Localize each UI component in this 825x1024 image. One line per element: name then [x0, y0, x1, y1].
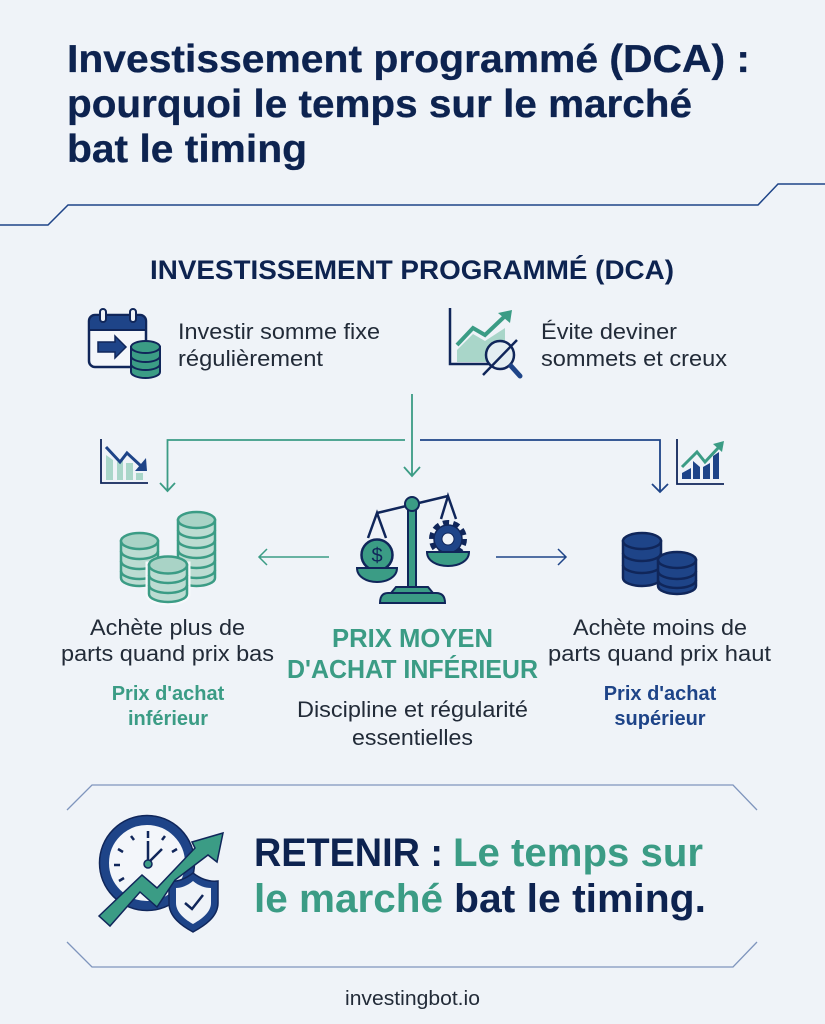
icon: rising chart [677, 439, 724, 484]
callout text: bat le timing. [454, 877, 706, 921]
text: higher purchase price [604, 683, 717, 730]
text: avoid guessing tops and bottoms [541, 319, 727, 371]
text: lower purchase price [112, 683, 225, 730]
arrow: to right coins [496, 549, 566, 565]
text: buy fewer shares: Achète moins de [573, 615, 747, 640]
arrow: branch to left [160, 440, 405, 491]
icon: calendar with coins [89, 309, 160, 378]
title: pourquoi le temps sur le marché [67, 83, 692, 126]
callout frame [67, 785, 757, 967]
callout text: le marché [254, 877, 443, 921]
text: buy more shares: Achète plus de [90, 615, 245, 640]
text: avoid guessing tops and bottoms: sommets et creux [541, 346, 727, 371]
text: buy fewer shares: parts quand prix haut [548, 641, 771, 666]
text: higher purchase price: supérieur [614, 708, 706, 730]
text: invest fixed amount: régulièrement [178, 346, 323, 371]
title: Investissement programmé (DCA) : [67, 38, 750, 81]
text: avoid guessing tops and bottoms: Évite deviner [541, 319, 677, 344]
text: lower average price [287, 623, 538, 684]
arrow: branch to right [420, 440, 668, 492]
icon: balance scale [357, 496, 469, 603]
title [67, 38, 750, 171]
icon: chart with magnifier [450, 308, 520, 376]
text: invest fixed amount: Investir somme fixe [178, 319, 380, 344]
text: lower average price: PRIX MOYEN [332, 623, 493, 653]
text: discipline: essentielles [352, 725, 473, 750]
text: discipline [297, 697, 528, 750]
text: buy more shares: parts quand prix bas [61, 641, 274, 666]
text: buy more shares [61, 615, 274, 666]
text: lower purchase price: Prix d'achat [112, 683, 225, 705]
icon: balance scale: $ [371, 545, 383, 567]
footer: investingbot.io [345, 988, 480, 1010]
text: buy fewer shares [548, 615, 771, 666]
title: bat le timing [67, 128, 307, 171]
icon: falling chart [101, 439, 148, 483]
icon: navy coin stacks [623, 533, 696, 594]
text: invest fixed amount [178, 319, 380, 371]
icon: green coin stacks [121, 512, 215, 602]
text: lower purchase price: inférieur [128, 708, 208, 730]
arrow: centre down [404, 394, 420, 476]
text: discipline: Discipline et régularité [297, 697, 528, 722]
section heading: INVESTISSEMENT PROGRAMMÉ (DCA) [150, 254, 674, 285]
callout text: RETENIR : [254, 831, 443, 875]
icon: clock, growth arrow and shield [99, 816, 223, 932]
callout text [254, 831, 706, 921]
text: lower average price: D'ACHAT INFÉRIEUR [287, 654, 538, 684]
text: higher purchase price: Prix d'achat [604, 683, 717, 705]
arrow: to left coins [259, 549, 329, 565]
callout text: Le temps sur [453, 831, 703, 875]
